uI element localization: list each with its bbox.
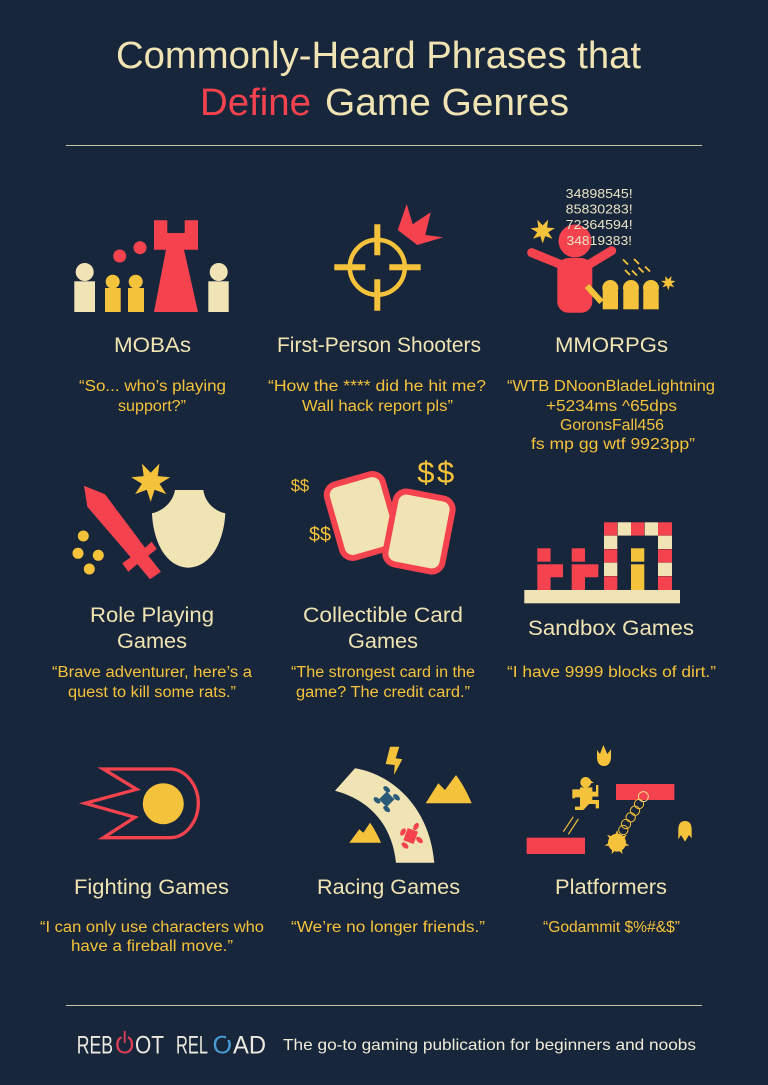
quote: game? The credit card.” — [296, 684, 470, 701]
quote: “So... who’s playing — [79, 378, 226, 395]
heading: Games — [117, 630, 187, 653]
heading: Racing Games — [317, 876, 460, 899]
heading: MOBAs — [114, 334, 191, 357]
icon: cards and dollar signs: $$ — [291, 476, 310, 495]
icon: sword, shield, star and coins — [72, 464, 225, 579]
quote: “I can only use characters who — [40, 919, 264, 936]
heading: Sandbox Games — [528, 617, 694, 640]
damage numbers: 34898545! — [566, 186, 633, 201]
heading: Collectible Card — [303, 604, 463, 627]
quote: “Godammit $%#&$” — [543, 919, 680, 936]
quote: “Brave adventurer, here’s a — [52, 664, 252, 681]
title: Define — [200, 82, 311, 124]
quote: support?” — [118, 398, 186, 415]
damage numbers — [566, 186, 633, 248]
icon: MOBA tower and players — [74, 220, 229, 312]
heading: Fighting Games — [74, 876, 229, 899]
logo: Reboot Reload: REL — [176, 1031, 208, 1059]
panel: Collectible Card Games — [291, 455, 475, 701]
quote: “How the **** did he hit me? — [268, 378, 486, 395]
panel: Racing Games — [291, 747, 485, 936]
quote — [268, 378, 486, 415]
quote — [79, 378, 226, 415]
damage numbers: 72364594! — [566, 217, 633, 232]
title — [116, 35, 641, 124]
title: Commonly-Heard Phrases that — [116, 35, 641, 77]
quote: fs mp gg wtf 9923pp” — [531, 436, 695, 453]
quote: “We’re no longer friends.” — [291, 919, 485, 936]
heading: First-Person Shooters — [277, 334, 481, 357]
heading: Games — [348, 630, 418, 653]
damage numbers: 85830283! — [566, 202, 633, 216]
quote: +5234ms ^65dps — [546, 398, 677, 415]
heading: Role Playing — [90, 604, 214, 627]
icon: raid boss with damage numbers — [531, 220, 676, 313]
panel: Role Playing Games — [52, 464, 252, 701]
quote: have a fireball move.” — [71, 938, 233, 955]
icon: crosshair and muzzle flash — [334, 204, 443, 311]
icon: cards and dollar signs — [291, 455, 455, 573]
logo: Reboot Reload: O — [213, 1031, 232, 1059]
logo: Reboot Reload: OT — [135, 1031, 164, 1059]
heading — [90, 604, 214, 653]
heading: MMORPGs — [555, 334, 668, 357]
quote: “WTB DNoonBladeLightning — [507, 378, 715, 395]
logo: Reboot Reload: REB — [77, 1031, 113, 1059]
panel: Sandbox Games — [507, 522, 716, 681]
quote: GoronsFall456 — [560, 417, 664, 434]
quote — [40, 919, 264, 955]
quote: quest to kill some rats.” — [68, 684, 236, 701]
tagline: The go-to gaming publication for beginners and noobs — [283, 1037, 696, 1054]
panel: MMORPGs — [507, 186, 715, 453]
quote: “I have 9999 blocks of dirt.” — [507, 664, 716, 681]
icon: platforms, jumper, mace — [527, 745, 692, 854]
panel: First-Person Shooters — [268, 204, 486, 415]
quote — [291, 664, 475, 701]
panel: Fighting Games — [40, 769, 264, 955]
icon: race track, cars, mountains — [335, 747, 472, 863]
quote: Wall hack report pls” — [302, 398, 453, 415]
logo: Reboot Reload — [77, 1031, 266, 1059]
damage numbers: 34819383! — [566, 233, 632, 248]
quote — [52, 664, 252, 701]
heading — [303, 604, 463, 653]
logo: Reboot Reload: O — [115, 1031, 134, 1059]
quote — [507, 378, 715, 453]
icon: fireball — [85, 769, 198, 838]
heading: Platformers — [555, 876, 667, 899]
footer — [77, 1031, 696, 1059]
icon: cards and dollar signs: $$ — [309, 524, 331, 546]
title: Game Genres — [325, 82, 569, 124]
quote: “The strongest card in the — [291, 664, 475, 681]
logo: Reboot Reload: AD — [233, 1031, 266, 1059]
panel: Platformers — [527, 745, 692, 936]
icon: cards and dollar signs: $$ — [417, 455, 454, 490]
icon: block building — [524, 522, 680, 603]
panel: MOBAs — [74, 220, 229, 415]
